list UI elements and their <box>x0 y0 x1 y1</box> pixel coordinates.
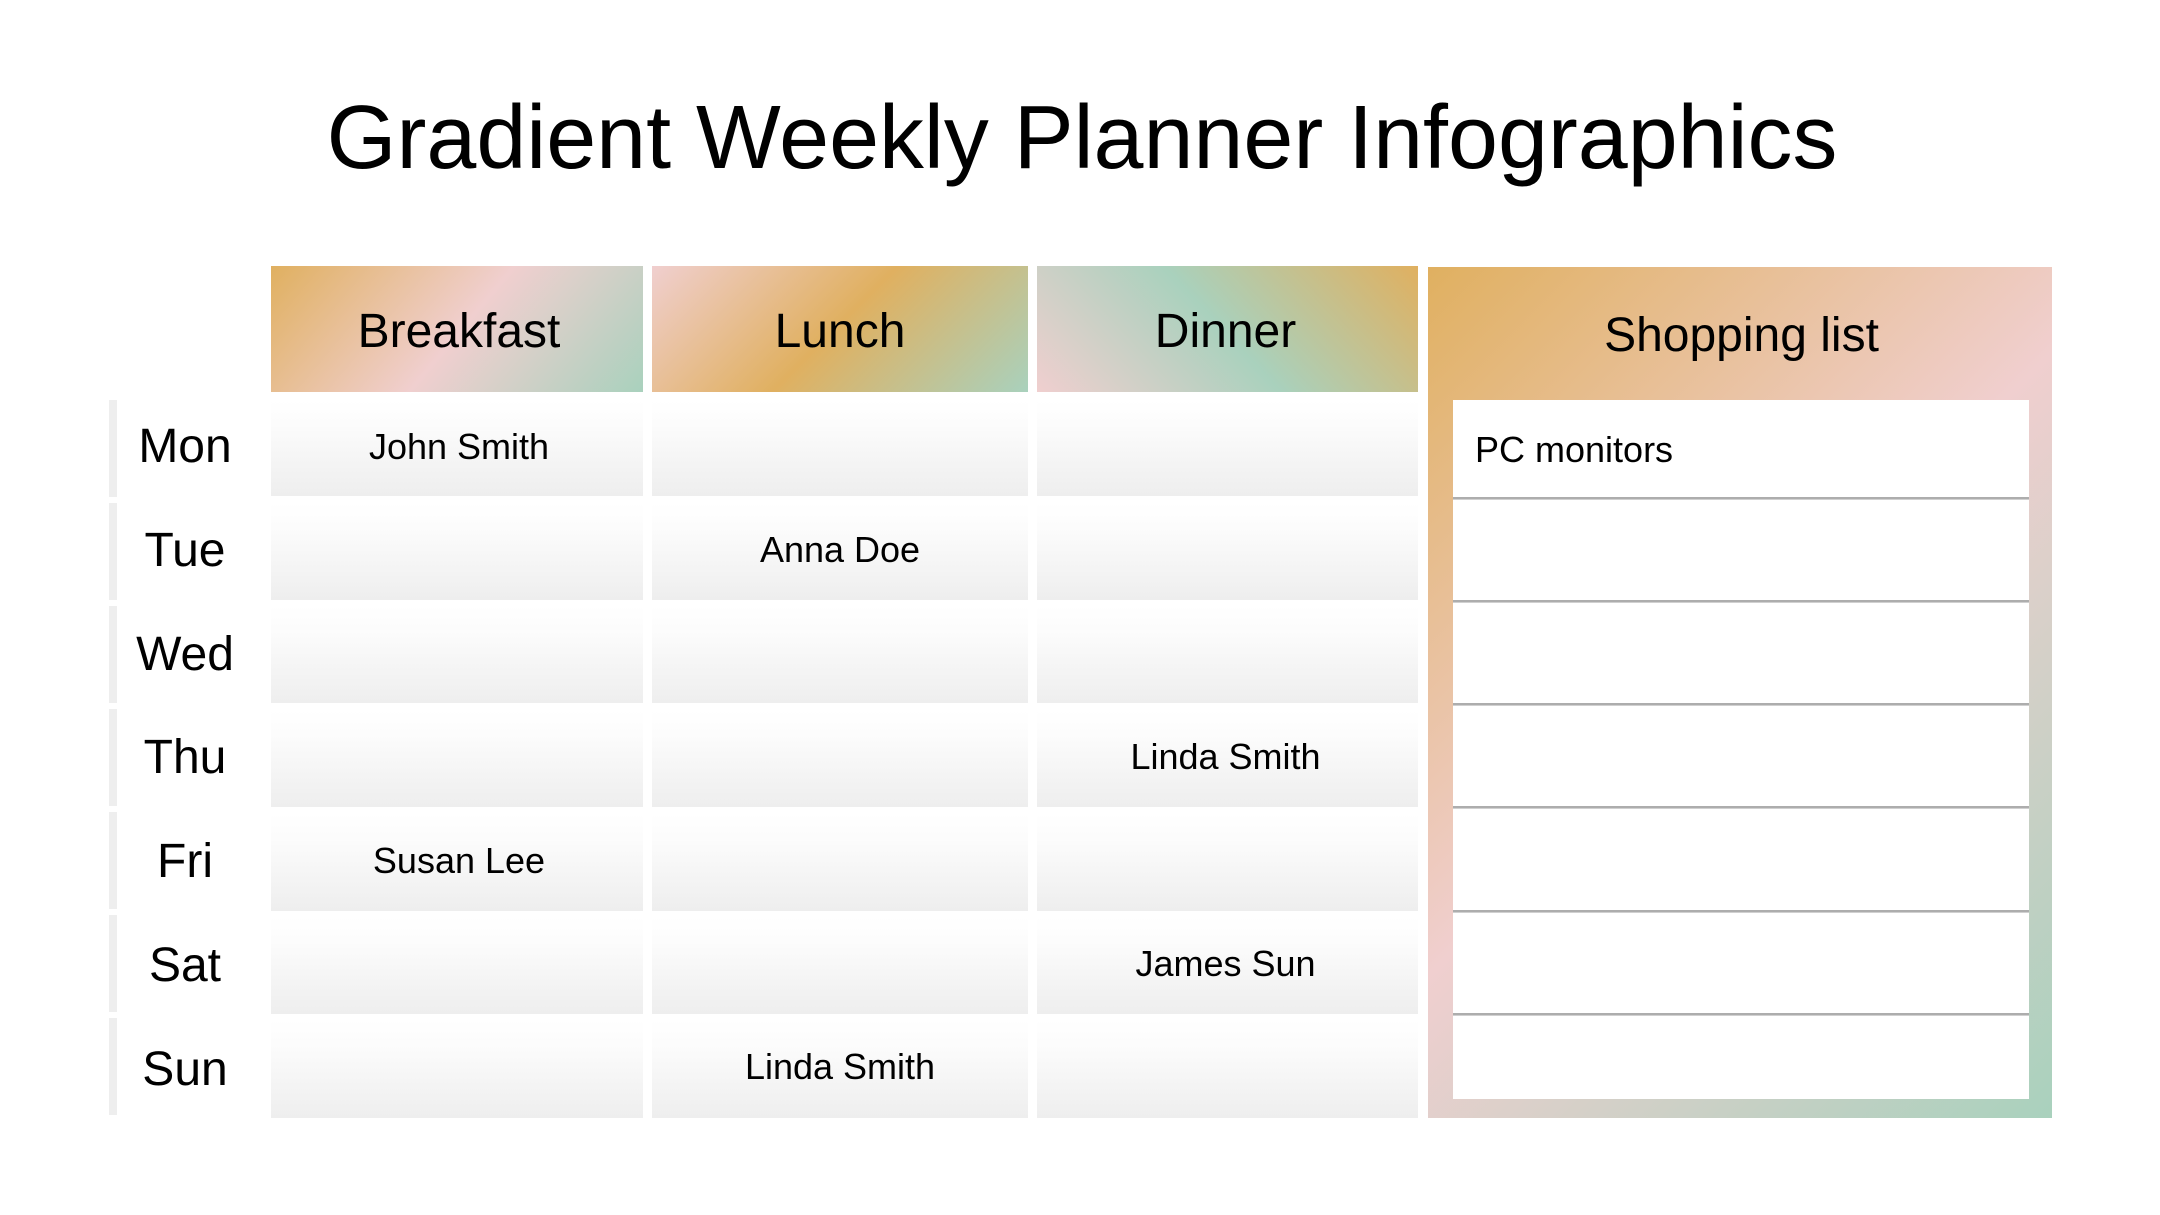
day: Sun: Sun <box>142 1043 228 1096</box>
day: Sun <box>109 1018 271 1115</box>
day: Thu <box>109 709 271 806</box>
day: Sat: Sat <box>149 939 221 992</box>
shopping item: PC monitors <box>1475 429 1673 470</box>
row rule 4 <box>1453 806 2029 808</box>
Wed breakfast cell <box>271 606 643 703</box>
Sun lunch cell <box>652 1020 1028 1118</box>
Fri breakfast cell: Susan Lee <box>373 840 545 881</box>
Fri lunch cell <box>652 814 1028 911</box>
Sun dinner cell <box>1037 1020 1418 1118</box>
Tue lunch cell <box>652 503 1028 600</box>
day: Sat <box>109 915 271 1012</box>
row rule 5 <box>1453 910 2029 912</box>
row rule 3 <box>1453 703 2029 705</box>
day: Mon: Mon <box>138 420 232 473</box>
column header: Breakfast: Breakfast <box>358 305 560 358</box>
day: Mon <box>109 400 271 497</box>
Thu dinner cell: Linda Smith <box>1130 736 1321 777</box>
Wed dinner cell <box>1037 606 1418 703</box>
Thu breakfast cell <box>271 710 643 807</box>
title: Gradient Weekly Planner Infographics <box>327 88 1837 188</box>
row rule 1 <box>1453 497 2029 499</box>
day: Wed <box>109 606 271 703</box>
Sat lunch cell <box>652 917 1028 1014</box>
shopping list sheet <box>1453 400 2029 1099</box>
day: Fri <box>109 812 271 909</box>
column header: Dinner: Dinner <box>1155 305 1296 358</box>
Sat breakfast cell <box>271 917 643 1014</box>
row rule 6 <box>1453 1013 2029 1015</box>
day: Thu: Thu <box>144 731 226 784</box>
Tue breakfast cell <box>271 503 643 600</box>
Sun lunch cell: Linda Smith <box>745 1046 935 1087</box>
day: Fri: Fri <box>157 835 213 888</box>
shopping list heading: Shopping list <box>1604 309 1879 362</box>
column header: Lunch <box>652 266 1028 392</box>
Wed lunch cell <box>652 606 1028 703</box>
panel: shopping list <box>1428 267 2052 1118</box>
column header: Dinner <box>1037 266 1418 392</box>
Mon breakfast cell <box>271 400 643 496</box>
Fri dinner cell <box>1037 814 1418 911</box>
Mon dinner cell <box>1037 400 1418 496</box>
Thu lunch cell <box>652 710 1028 807</box>
Sat dinner cell: James Sun <box>1135 943 1316 984</box>
day: Wed: Wed <box>136 628 234 681</box>
Tue dinner cell <box>1037 503 1418 600</box>
Sat dinner cell <box>1037 917 1418 1014</box>
column header: Breakfast <box>271 266 643 392</box>
row rule 2 <box>1453 600 2029 602</box>
day: Tue <box>109 503 271 600</box>
Sun breakfast cell <box>271 1020 643 1118</box>
Fri breakfast cell <box>271 814 643 911</box>
Tue lunch cell: Anna Doe <box>760 529 920 570</box>
Mon breakfast cell: John Smith <box>369 426 549 467</box>
Thu dinner cell <box>1037 710 1418 807</box>
column header: Lunch: Lunch <box>775 305 905 358</box>
Mon lunch cell <box>652 400 1028 496</box>
day: Tue: Tue <box>145 524 225 577</box>
